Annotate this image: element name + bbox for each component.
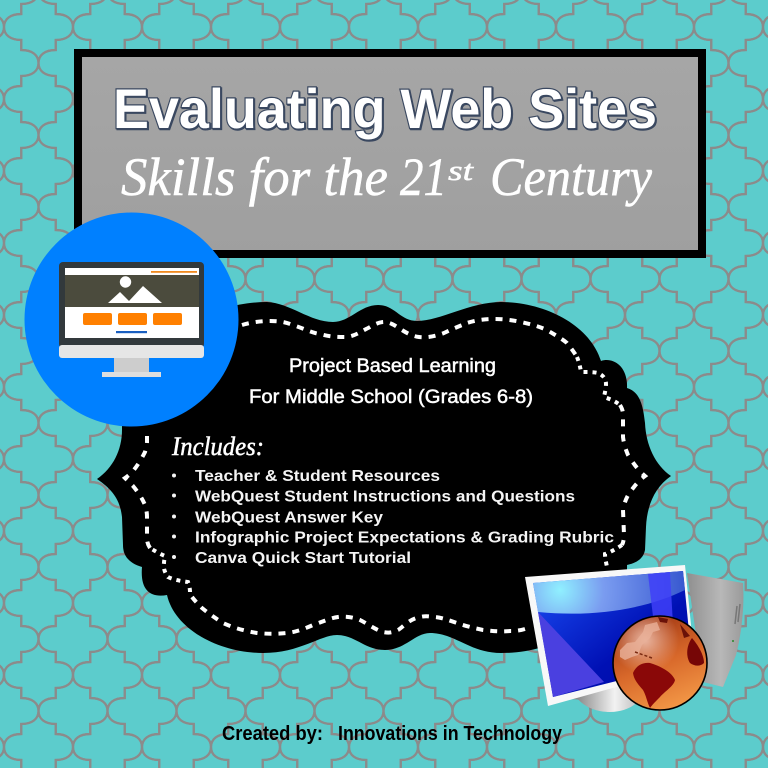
monitor base — [577, 680, 640, 712]
list: contents: Teacher & Student Resources — [195, 468, 440, 485]
credit line: Created by: — [222, 723, 323, 745]
panel: black ornate label — [97, 302, 671, 653]
icon: blue circle with web page monitor — [24, 212, 238, 426]
subtitle: Skills for the 21st Century: st — [448, 156, 475, 187]
heading: Includes: Includes: — [171, 432, 264, 461]
list: contents: WebQuest Answer Key — [195, 510, 383, 526]
heading: Project Based Learning: Project Based Learning — [289, 355, 496, 377]
list: contents — [172, 468, 614, 567]
icon: computer with globe — [525, 565, 743, 712]
subtitle: Skills for the 21st Century: Century — [490, 147, 652, 207]
globe — [613, 616, 707, 710]
list: contents: Infographic Project Expectations & Grading Rubric — [195, 530, 614, 546]
list: contents: Canva Quick Start Tutorial — [195, 550, 411, 567]
list: contents: WebQuest Student Instructions and Questions — [195, 488, 575, 506]
subtitle: Skills for the 21st Century: Skills for the — [121, 147, 388, 207]
computer tower — [687, 573, 743, 687]
subtitle: Skills for the 21st Century: 21 — [400, 147, 447, 207]
subtitle: Skills for the 21st Century — [121, 147, 652, 207]
title: Evaluating Web Sites: Evaluating Web Sites — [113, 77, 657, 140]
heading: For Middle School: For Middle School (Grades 6-8) — [249, 386, 533, 408]
title panel — [78, 53, 702, 254]
credit line: Innovations in Technology — [338, 723, 563, 745]
credit line — [222, 723, 563, 745]
monitor screen — [525, 565, 695, 706]
